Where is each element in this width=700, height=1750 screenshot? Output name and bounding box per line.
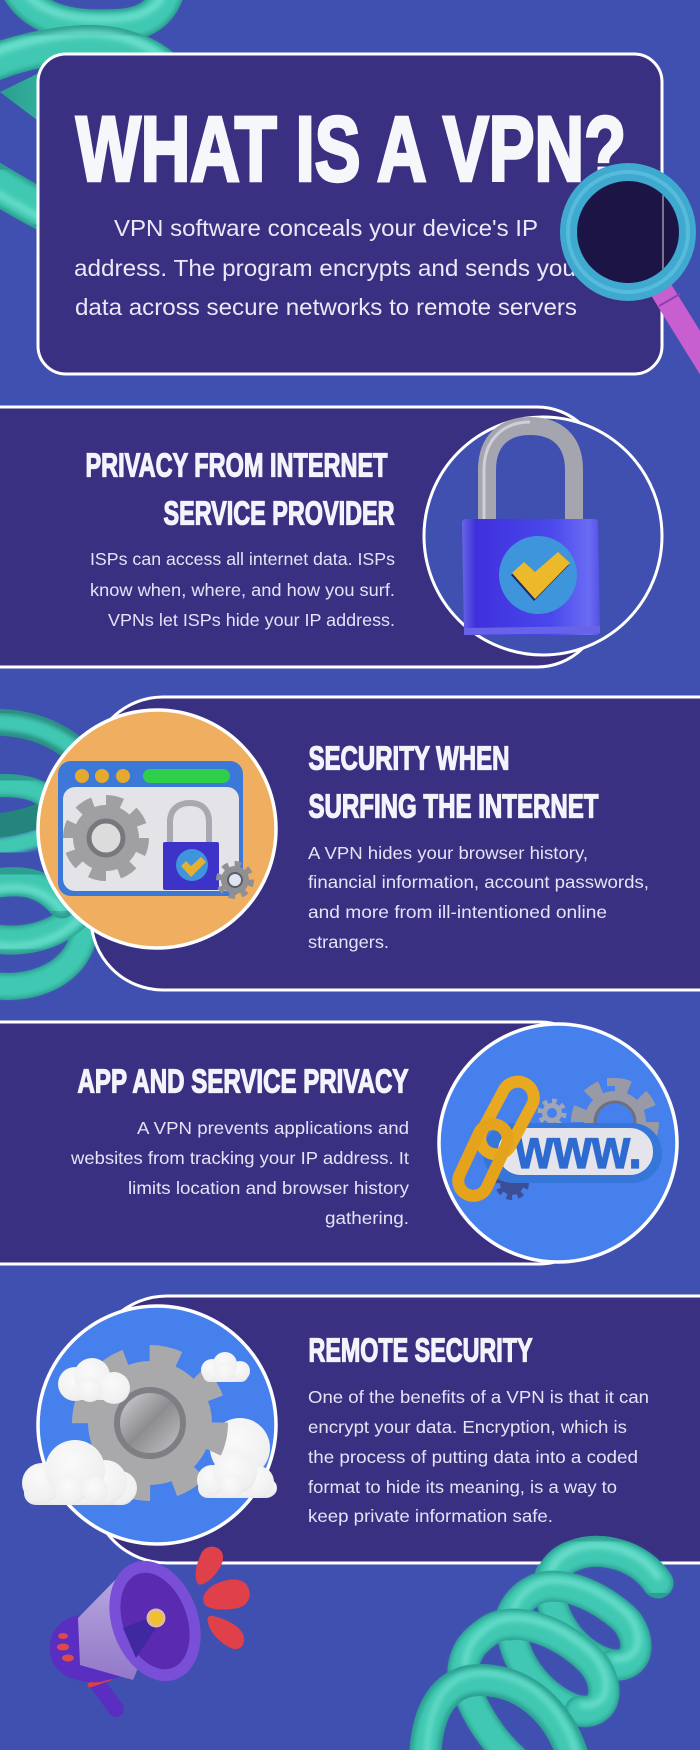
body text: A VPN prevents applications and [137,1118,409,1138]
body text: A VPN hides your browser history, [308,843,588,863]
body text: One of the benefits of a VPN is that it can [308,1387,649,1407]
circle [38,710,276,948]
heading: REMOTE SECURITY [308,1332,532,1368]
icon: browser window with gear and padlock [58,761,251,896]
body text: limits location and browser history [128,1178,409,1198]
icon: magnifying glass [560,163,700,372]
body text: and more from ill-intentioned online [308,902,607,922]
body text: format to hide its meaning, is a way to [308,1477,617,1497]
heading [308,740,598,824]
circle [424,417,662,655]
intro text: VPN software conceals your device's IP [114,215,538,241]
panel: remote security [22,1296,700,1563]
panel: security when surfing the internet [38,697,700,990]
circle [38,1306,276,1544]
sound drops [196,1547,250,1649]
body text [308,843,649,952]
body text: keep private information safe. [308,1506,553,1526]
body text: financial information, account passwords, [308,872,649,892]
decorative coil: left middle [0,722,85,987]
heading: APP AND SERVICE PRIVACY [78,1062,408,1100]
icon: padlock [462,422,600,635]
icon: gear with clouds [22,1352,277,1505]
panel shape [0,1022,600,1264]
body text: ISPs can access all internet data. ISPs [90,549,395,569]
decorative coil: bottom right [425,1545,658,1750]
circle [439,1024,677,1262]
panel shape [92,1296,700,1563]
panel: privacy from internet service provider [0,407,662,667]
heading: SECURITY WHEN [308,740,510,776]
body text: know when, where, and how you surf. [90,580,395,600]
body text: the process of putting data into a coded [308,1447,638,1467]
heading: PRIVACY FROM INTERNET [86,446,388,484]
panel: app and service privacy [0,1022,677,1264]
panel: header [38,54,662,374]
heading: SURFING THE INTERNET [308,788,598,824]
intro text [74,215,584,320]
body text [90,549,395,630]
heading [86,446,395,532]
intro text: data across secure networks to remote servers [75,294,577,320]
icon: megaphone [50,1547,250,1709]
heading: SERVICE PROVIDER [164,494,395,532]
icon: www bar with chain links and gears [453,1076,662,1201]
body text: VPNs let ISPs hide your IP address. [108,610,395,630]
panel shape [0,407,602,667]
decorative coil: top left [0,0,170,221]
body text [308,1387,649,1526]
body text: websites from tracking your IP address. It [70,1148,409,1168]
icon: www bar with chain links and gears: www. [514,1117,642,1180]
header box [38,54,662,374]
body text: strangers. [308,932,389,952]
body text [70,1118,409,1228]
body text: gathering. [325,1208,409,1228]
intro text: address. The program encrypts and sends your [74,255,584,281]
body text: encrypt your data. Encryption, which is [308,1417,627,1437]
panel shape [91,697,700,990]
